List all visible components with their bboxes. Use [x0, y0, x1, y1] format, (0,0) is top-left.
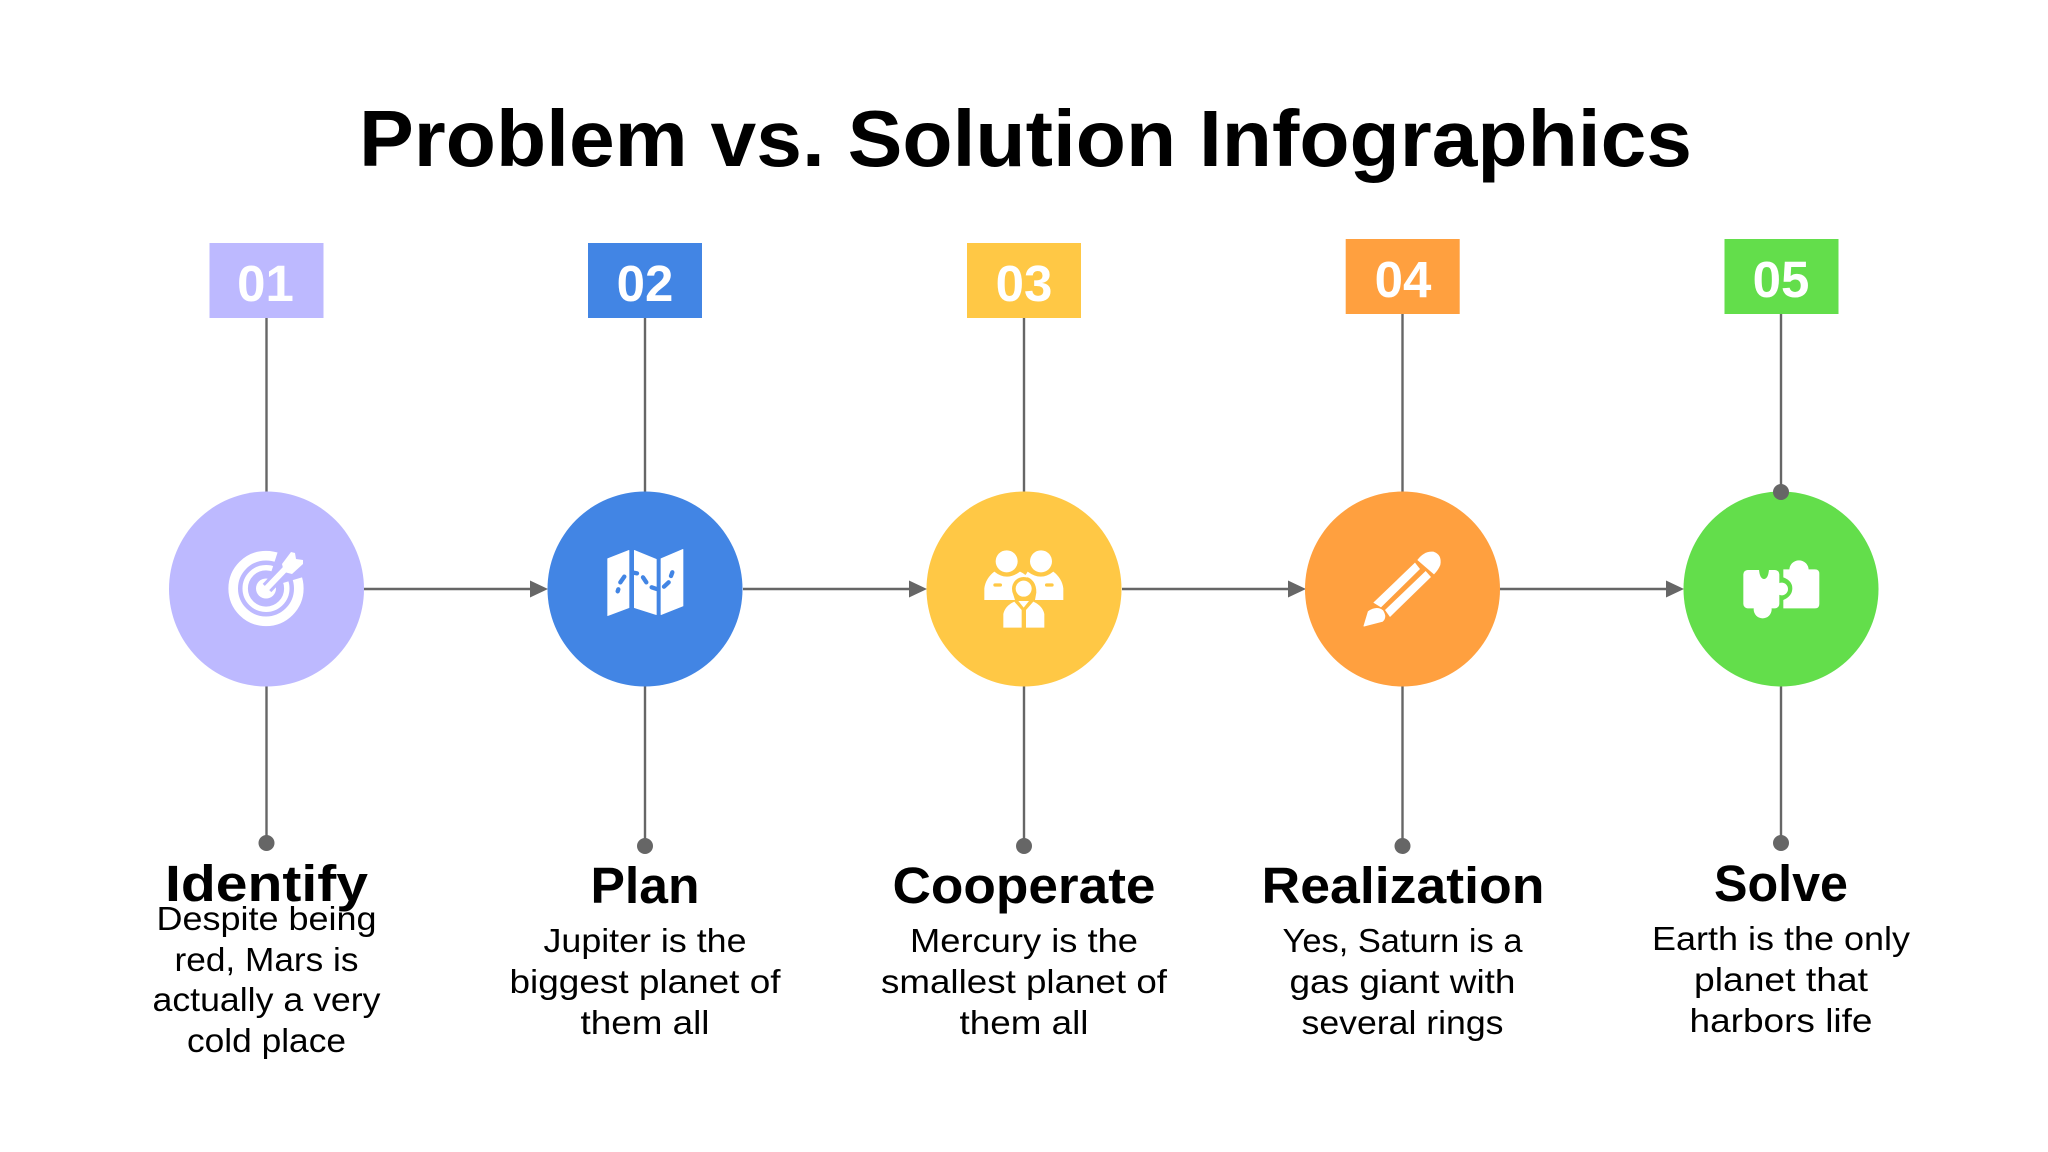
description	[152, 900, 381, 1059]
heading: Cooperate	[892, 857, 1156, 914]
number badge 01	[210, 243, 324, 318]
number badge 02: 02	[617, 255, 673, 312]
arrow: step 2 to step 3	[743, 580, 927, 598]
description: Despite being	[156, 900, 376, 937]
description	[1282, 922, 1523, 1041]
number badge 05	[1724, 239, 1838, 314]
description	[881, 922, 1168, 1041]
description: Jupiter is the	[544, 922, 746, 959]
step 3: cooperate	[881, 243, 1168, 1041]
description: planet that	[1694, 961, 1868, 998]
description: Mercury is the	[910, 922, 1138, 959]
circle with team icon	[926, 492, 1122, 686]
circle with puzzle icon	[1684, 484, 1878, 686]
heading: Identify	[165, 855, 369, 912]
number badge 03	[967, 243, 1081, 318]
description: actually a very	[152, 981, 381, 1018]
arrow: step 4 to step 5	[1500, 580, 1684, 598]
step 1: identify	[152, 243, 381, 1059]
description: gas giant with	[1290, 963, 1516, 1000]
step 5: solve	[1652, 239, 1911, 1039]
description: cold place	[187, 1022, 346, 1059]
arrow: step 1 to step 2	[364, 580, 548, 598]
step 4: realization	[1262, 239, 1544, 1041]
description: Earth is the only	[1652, 920, 1911, 957]
step 2: plan	[510, 243, 781, 1041]
description: red, Mars is	[174, 941, 358, 978]
description	[1652, 920, 1911, 1039]
description: biggest planet of	[510, 963, 781, 1000]
description: harbors life	[1690, 1002, 1872, 1039]
title: Problem vs. Solution Infographics	[359, 94, 1692, 183]
heading: Realization	[1262, 857, 1544, 914]
number badge 05: 05	[1753, 251, 1809, 308]
circle with target icon	[169, 492, 364, 686]
heading: Plan	[590, 857, 700, 914]
description: smallest planet of	[881, 963, 1168, 1000]
heading: Solve	[1714, 855, 1848, 912]
number badge 04: 04	[1375, 251, 1432, 308]
arrow: step 3 to step 4	[1122, 580, 1306, 598]
number badge 01: 01	[237, 255, 294, 312]
circle with pencil icon	[1305, 492, 1500, 686]
number badge 03: 03	[996, 255, 1052, 312]
circle with map icon	[548, 492, 742, 686]
description: them all	[580, 1004, 710, 1041]
description: them all	[960, 1004, 1088, 1041]
number badge 02	[588, 243, 702, 318]
description: Yes, Saturn is a	[1282, 922, 1523, 959]
description	[510, 922, 781, 1041]
description: several rings	[1302, 1004, 1504, 1041]
number badge 04	[1346, 239, 1460, 314]
